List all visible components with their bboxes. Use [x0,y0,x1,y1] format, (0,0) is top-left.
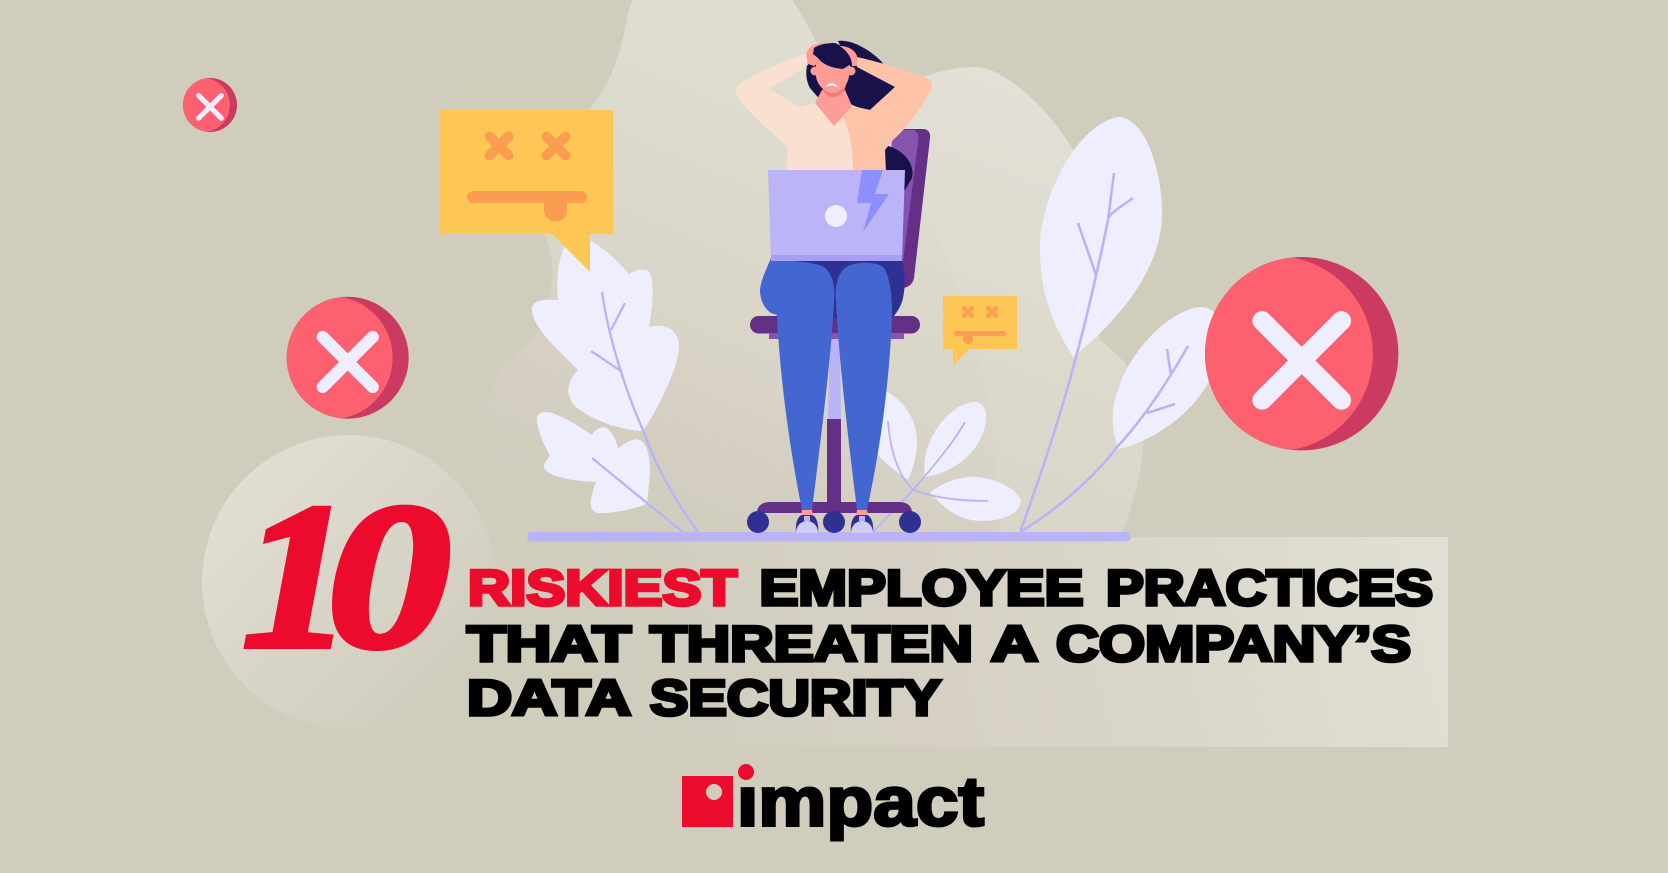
face [816,58,849,93]
hips shadow [772,258,905,318]
fringe [813,43,851,69]
icon: error circle medium [287,297,409,419]
icon: speech bubble small [943,296,1017,366]
heading [467,560,1433,726]
laptop [768,170,905,261]
chair pole light [828,339,841,420]
leaf: lower [930,477,1021,521]
heading: COMPANY’S [1056,616,1411,672]
heading: PRACTICES [1106,560,1433,616]
illustration: woman on chair [736,41,932,533]
ears [810,66,856,76]
shoe right [851,510,873,533]
chair back highlight [880,130,919,262]
chair pole [827,419,841,504]
wheel right [899,511,921,533]
plant: left [532,241,698,532]
chair seat underside [769,333,904,339]
shoe left [796,510,818,533]
floor bar [527,532,1131,542]
heading: THAT [467,616,631,672]
hair behind shoulder [884,145,913,190]
title panel [470,537,1448,747]
wheel left [747,511,769,533]
leaf: behind leg [860,390,917,480]
plant: small centre right [860,390,1021,532]
chair seat [750,316,920,334]
stems: small plant [873,421,988,532]
chin shadow [822,84,846,97]
leaf: large right [1040,117,1162,357]
background blob: right [820,67,1144,560]
big number 10 [242,461,451,691]
heading: EMPLOYEE [760,560,1084,616]
arm and torso: left cream [736,54,853,172]
big number 10: 0 [327,461,451,691]
chair back [880,129,930,288]
leaf: upper left [532,241,679,431]
hand right [840,46,857,66]
background blob: centre [488,0,1000,537]
heading: THREATEN [650,616,973,672]
chair base [757,502,912,513]
logo wordmark: impact [737,762,984,840]
heading: RISKIEST [468,560,737,616]
wheel centre [823,511,845,533]
heading: A [991,616,1038,672]
hair back left [806,47,832,102]
heading: SECURITY [650,670,941,726]
heading: DATA [467,670,631,726]
leg right [836,263,892,510]
leg left [760,258,834,510]
icon: error circle small [183,78,237,132]
big number 10: 1 [242,461,352,691]
arm and torso: right peach [843,57,932,172]
leaf: lower left [537,412,650,513]
leaf: lower right [1113,307,1221,449]
icon: lightning bolt [857,170,889,232]
logo mark [682,776,733,827]
icon: error circle large [1205,257,1398,450]
leaf: middle [924,402,986,477]
logo dot [738,764,754,780]
hand left [806,43,832,66]
laptop logo [825,205,847,227]
icon: speech bubble large [440,110,613,272]
mouth [826,83,837,87]
neck [815,90,852,126]
logo: impact [682,762,984,840]
background circle behind 10 [202,435,496,729]
stems: left plant [591,292,698,532]
plant: right [1020,117,1221,532]
stems: right plant [1020,173,1188,532]
hair back right [838,41,895,110]
